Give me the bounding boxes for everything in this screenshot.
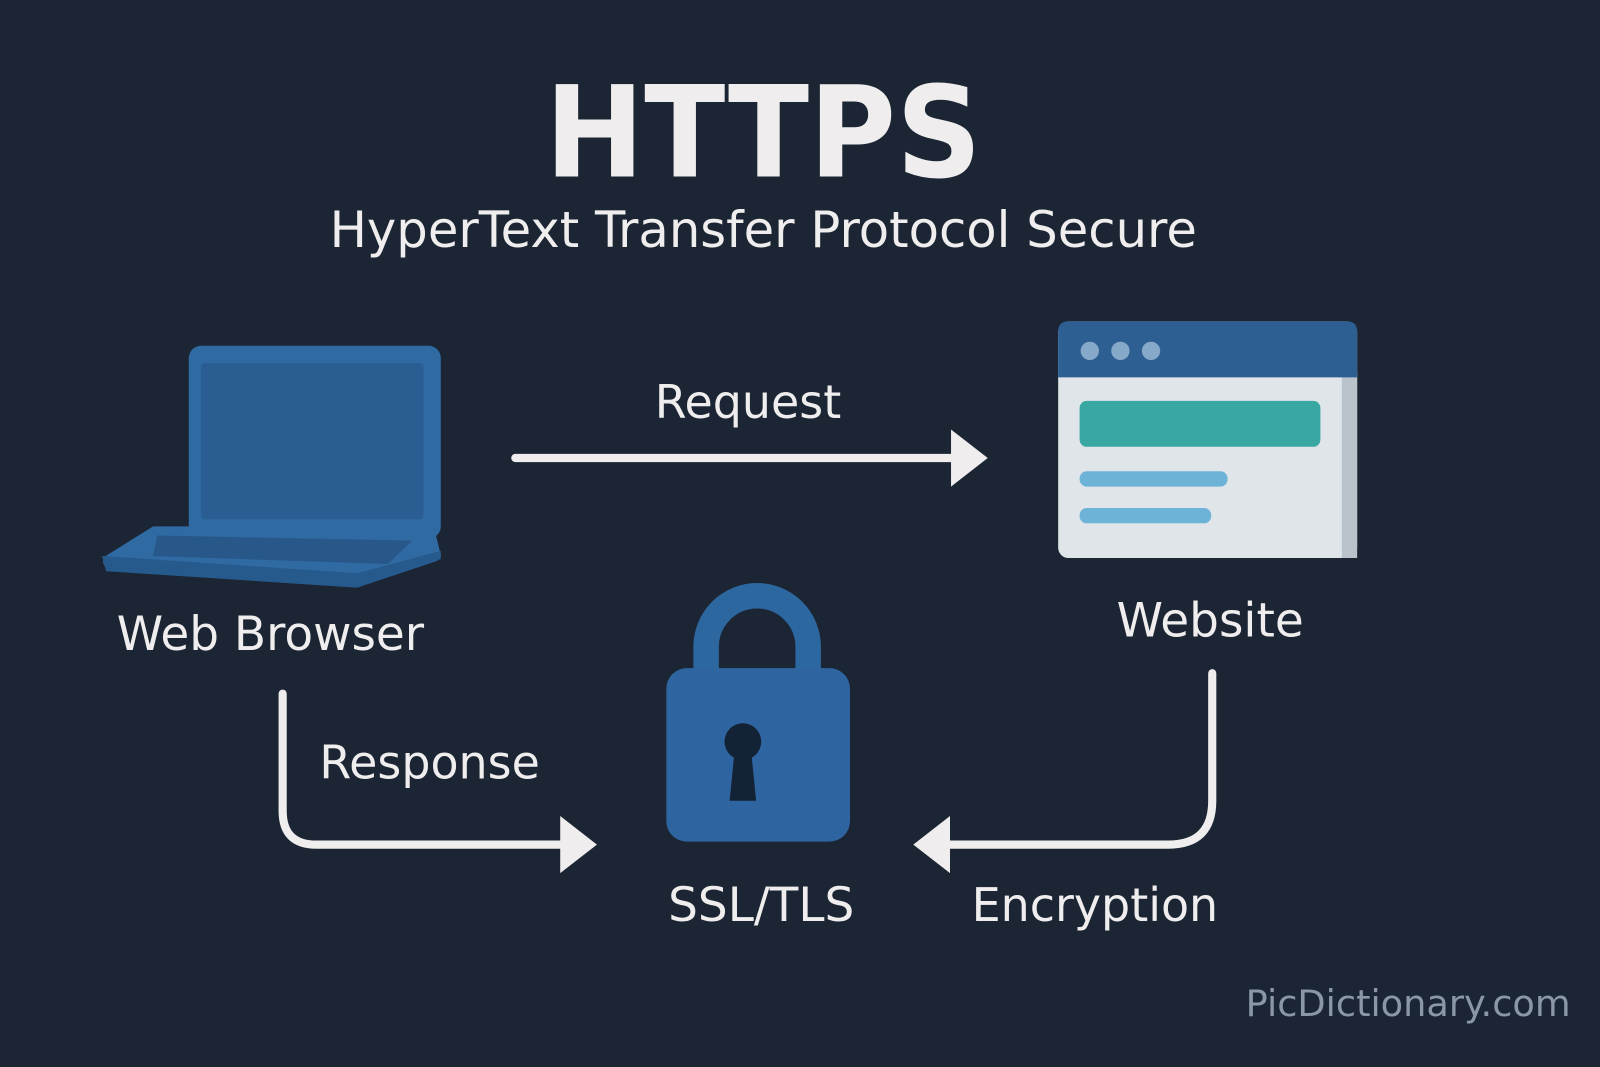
label: Encryption: Encryption [972, 878, 1218, 932]
label: Website: Website [1117, 594, 1304, 649]
label: Web Browser: Web Browser [117, 607, 425, 662]
subtitle: HyperText Transfer Protocol Secure [330, 201, 1197, 259]
icon: padlock [666, 596, 850, 842]
arrow: response [283, 694, 597, 873]
label: Request: Request [655, 375, 841, 429]
label: Response: Response [319, 735, 540, 789]
title: HTTPS [545, 59, 982, 206]
icon: laptop [102, 346, 441, 588]
icon: website window [1058, 321, 1357, 558]
arrow: encryption [913, 673, 1212, 873]
arrow: request [515, 429, 988, 487]
watermark: PicDictionary.com [1246, 982, 1571, 1025]
label: SSL/TLS: SSL/TLS [668, 878, 854, 933]
